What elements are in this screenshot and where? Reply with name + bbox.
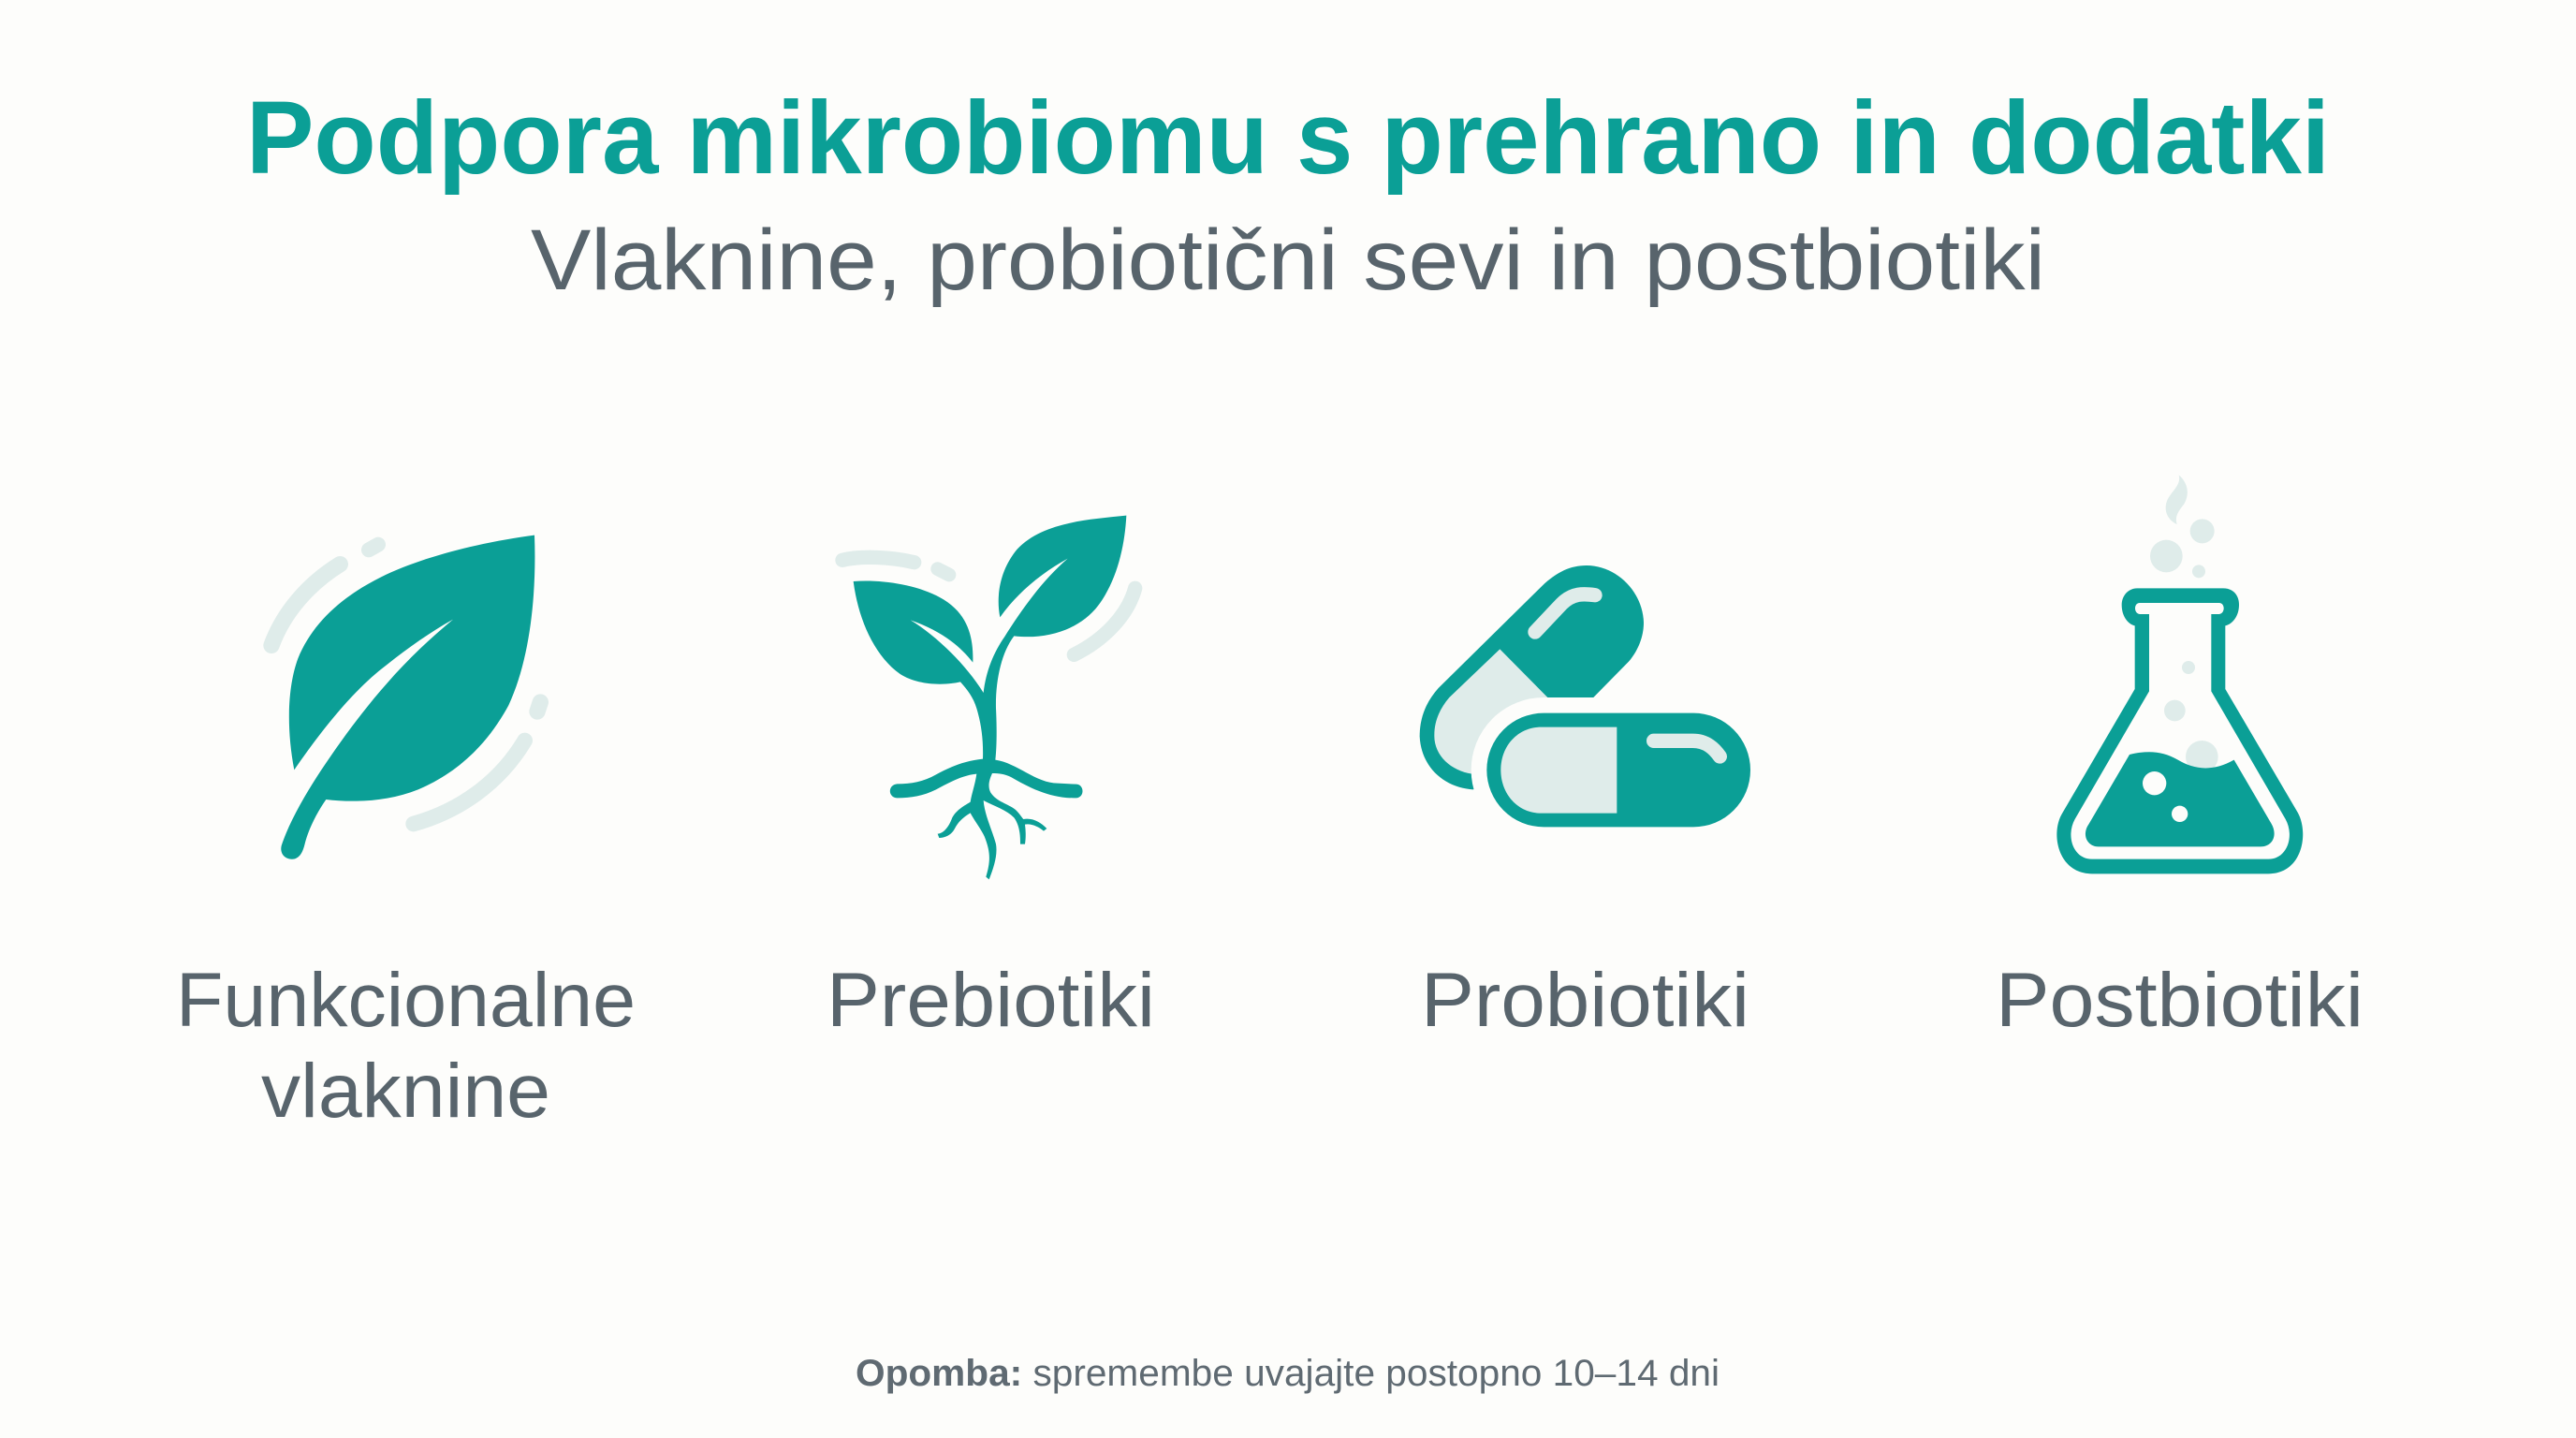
- label: Funkcionalne vlaknine: Funkcionalne: [176, 958, 636, 1043]
- subtitle: Vlaknine, probiotični sevi in postbiotiki: [531, 213, 2045, 308]
- label: Postbiotiki: Postbiotiki: [1996, 958, 2364, 1043]
- icon: flask: [2056, 475, 2303, 873]
- label: Probiotiki: Probiotiki: [1421, 958, 1749, 1043]
- label: Funkcionalne vlaknine: [176, 958, 636, 1134]
- icon: sprout with roots: [842, 516, 1135, 879]
- footnote: Opomba: spremembe uvajajte postopno 10–14 dni: [856, 1353, 1720, 1394]
- label: Prebiotiki: Prebiotiki: [827, 958, 1155, 1043]
- icon: leaf: [271, 536, 540, 859]
- label: Funkcionalne vlaknine: vlaknine: [261, 1049, 550, 1134]
- title: Podpora mikrobiomu s prehrano in dodatki: [246, 81, 2330, 196]
- icon: capsules: [1420, 565, 1750, 827]
